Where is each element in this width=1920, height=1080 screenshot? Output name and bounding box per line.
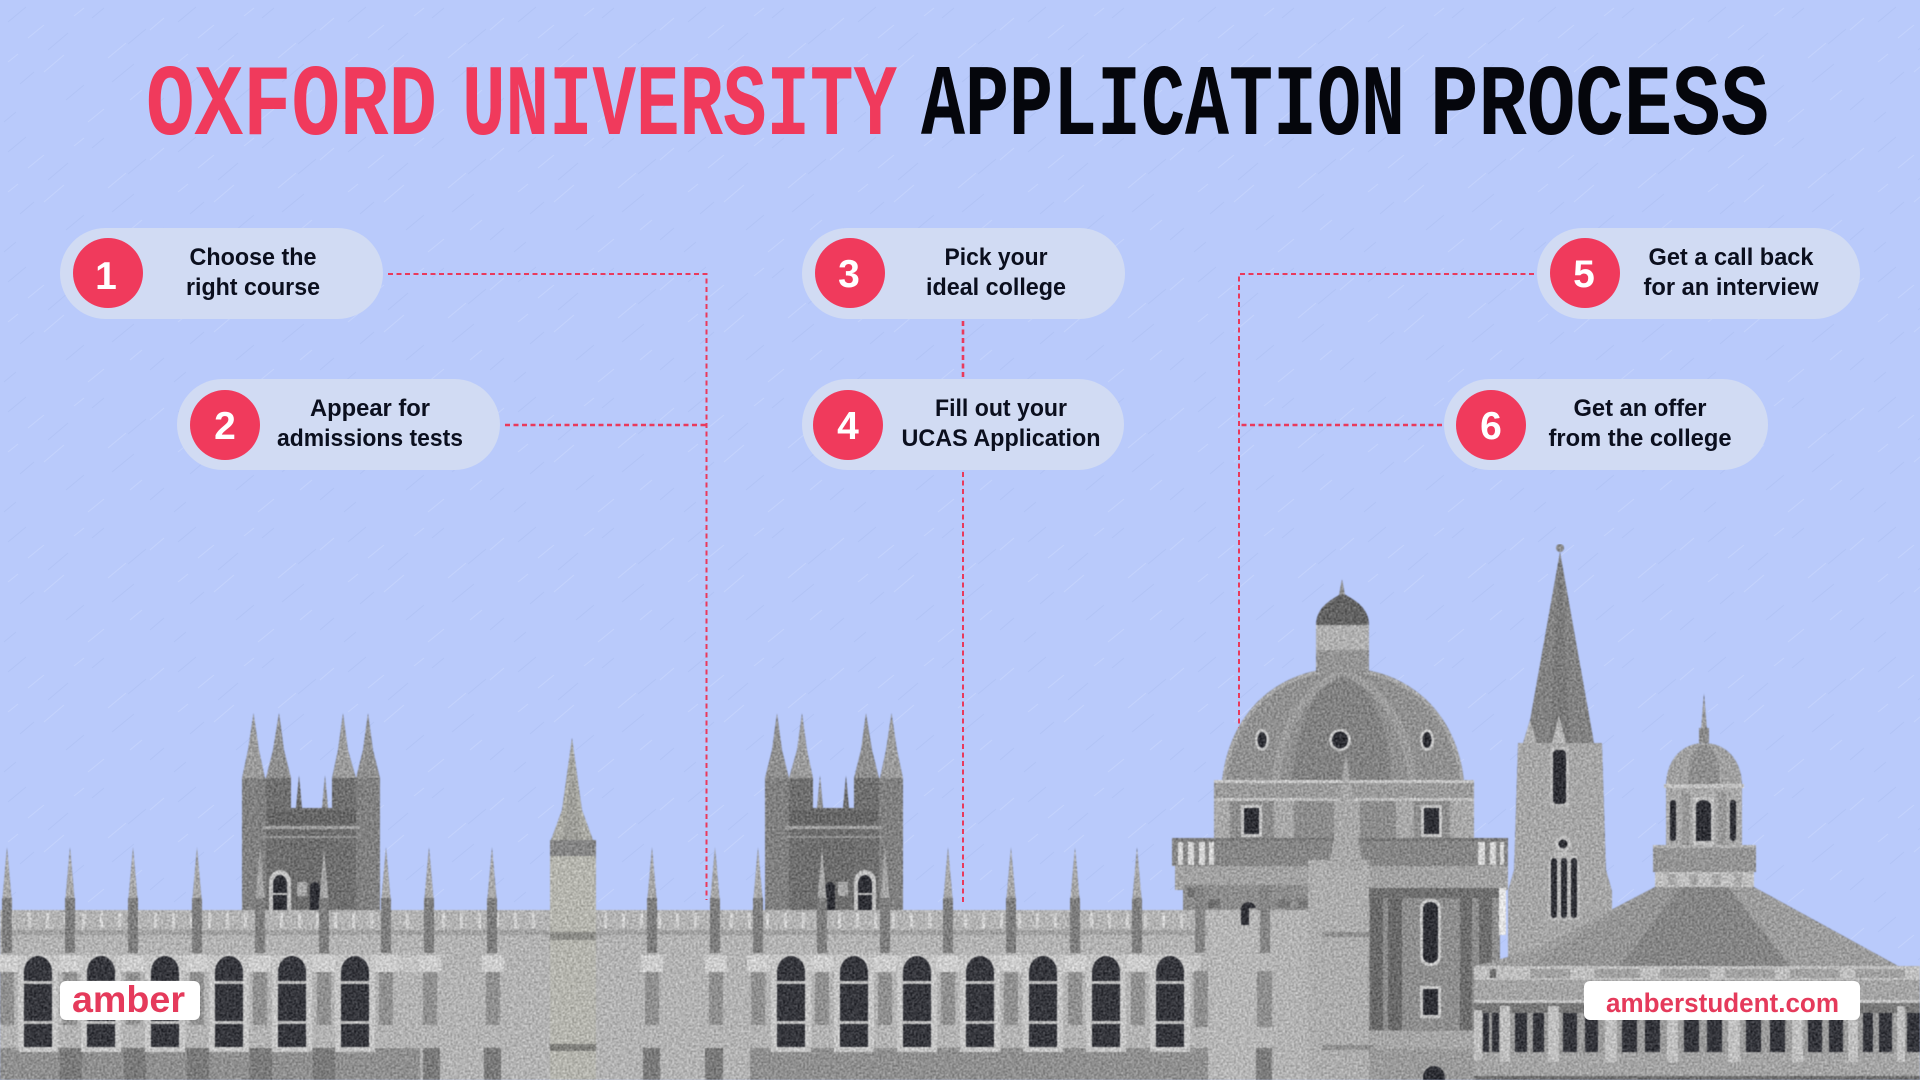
skyline illustration: [0, 544, 1920, 1080]
step 2: admissions tests: [277, 425, 463, 452]
building: right cupola: [1653, 693, 1756, 887]
colonnade pillars: [1474, 1006, 1905, 1062]
step 4: Fill out your: [935, 395, 1067, 422]
step 2: Appear for: [310, 395, 430, 422]
building: radcliffe dome: [1172, 579, 1508, 1080]
website label: amberstudent.com: [1606, 988, 1839, 1018]
wall spires: [2, 847, 1142, 953]
step 6: Get an offer: [1574, 395, 1706, 422]
step 4: UCAS Application: [902, 425, 1100, 452]
step 2: 2: [214, 405, 236, 448]
title: black part: PROCESS: [1430, 51, 1769, 165]
logo: amber: amber: [72, 979, 185, 1020]
wall piers: [0, 955, 1149, 1025]
title: red part: OXFORD: [146, 51, 437, 165]
step 6: [1444, 379, 1768, 470]
slender central spire tower: [550, 738, 596, 1080]
step 5: Get a call back: [1648, 244, 1814, 271]
step 2: [177, 379, 500, 470]
step 1: 1: [95, 255, 117, 298]
building: octagonal roof and colonnade: [1474, 887, 1920, 1080]
front pale towers by the dome: [1194, 752, 1374, 1080]
central tower left: [242, 713, 380, 910]
title: red part: [146, 51, 897, 165]
colonnade windows: [1483, 1013, 1920, 1052]
step 1: Choose the: [190, 244, 316, 271]
step 1: [60, 228, 383, 319]
step 3: ideal college: [926, 274, 1066, 301]
title: red part: UNIVERSITY: [462, 51, 897, 165]
title: black part: APPLICATION: [921, 51, 1405, 165]
central tower right: [765, 713, 903, 910]
step 3: 3: [838, 253, 860, 296]
step 4: [802, 379, 1124, 470]
step 5: [1537, 228, 1860, 319]
arched windows: [18, 954, 1190, 1052]
step 6: from the college: [1548, 425, 1732, 452]
step 5: for an interview: [1644, 274, 1819, 301]
step 1: right course: [186, 274, 320, 301]
title: [146, 51, 1769, 165]
step 3: Pick your: [944, 244, 1048, 271]
step 4: 4: [837, 405, 859, 448]
step 5: 5: [1573, 253, 1595, 296]
step 6: 6: [1480, 405, 1502, 448]
building: church spire tower: [1508, 544, 1612, 980]
dashed connector lines: [388, 274, 1534, 905]
website label: [1584, 981, 1860, 1020]
step 3: [802, 228, 1125, 319]
building: main wall with battlements: [0, 910, 1308, 1080]
